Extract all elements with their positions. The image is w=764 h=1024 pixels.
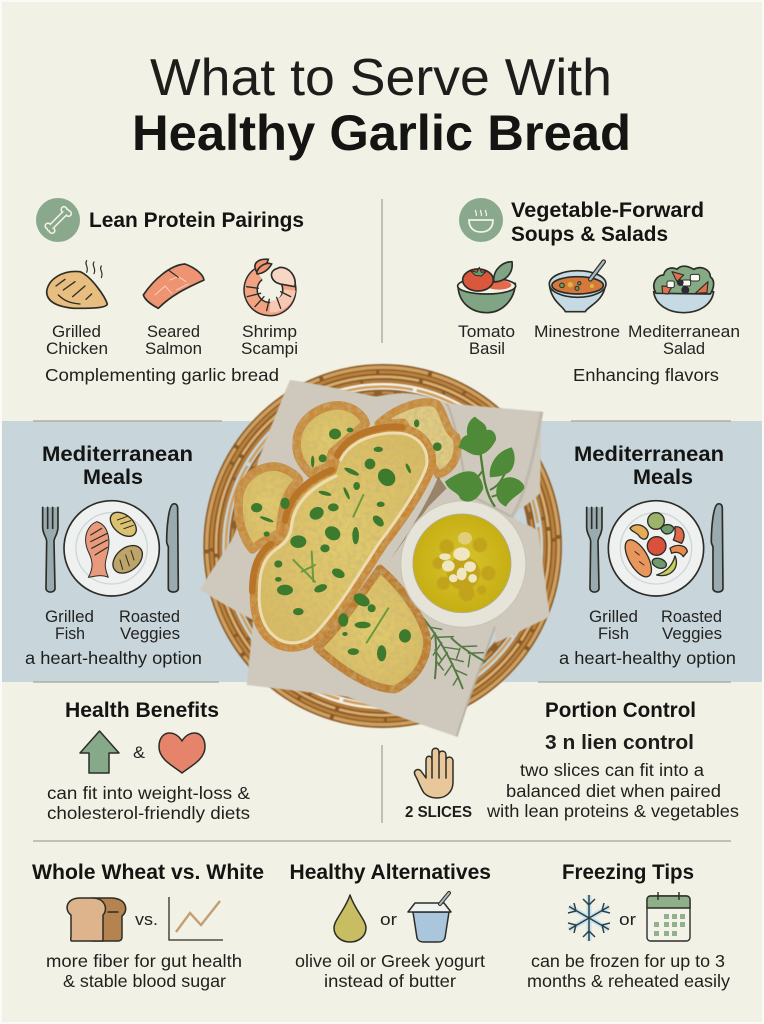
description: can fit into weight-loss & [47, 783, 250, 803]
icon: snowflake [568, 895, 610, 941]
panel: freezing tips [527, 861, 730, 991]
caption: Enhancing flavors [573, 365, 719, 385]
panel: mediterranean meals left [25, 443, 202, 668]
heading [511, 199, 704, 246]
icon: bone badge [36, 198, 80, 242]
icon: plate with vegetables [587, 501, 723, 596]
heading: Lean Protein Pairings [89, 209, 304, 232]
rosemary sprig [423, 618, 485, 688]
item labels: Minestrone [534, 323, 620, 341]
description: balanced diet when paired [506, 781, 721, 801]
icon: calendar [647, 892, 690, 941]
heading [574, 443, 724, 489]
panel: health benefits [47, 699, 250, 823]
description: months & reheated easily [527, 971, 730, 991]
heading: Freezing Tips [562, 861, 694, 884]
item labels: Roasted [119, 608, 180, 626]
item labels: Shrimp [242, 323, 297, 341]
icon: plate with fish and veggies [43, 501, 178, 596]
item labels: Veggies [120, 625, 180, 643]
vs label: vs. [135, 911, 158, 929]
item labels: Mediterranean [628, 323, 740, 341]
hero: basket of garlic bread [200, 367, 559, 737]
item labels: Scampi [241, 340, 298, 358]
icon: up arrow [80, 731, 119, 773]
icon: hand [415, 748, 453, 798]
caption: a heart-healthy option [25, 648, 202, 668]
item labels: Grilled [589, 608, 638, 626]
caption: a heart-healthy option [559, 648, 736, 668]
description [46, 951, 242, 991]
panel: portion control [405, 699, 739, 821]
dip bowl of olive oil and garlic [401, 501, 526, 627]
band: blue background strip [2, 421, 762, 682]
item labels [45, 608, 180, 643]
item labels [46, 323, 298, 358]
description [47, 783, 250, 823]
linen napkin [200, 380, 550, 737]
heading: Mediterranean [42, 443, 193, 466]
title: What to Serve With [150, 49, 612, 107]
or label: or [380, 911, 398, 929]
heading: Soups & Salads [511, 223, 668, 246]
heading: Meals [83, 466, 143, 489]
item labels: Basil [469, 340, 505, 358]
item labels: Seared [147, 323, 200, 341]
description [486, 760, 739, 821]
icon: soup badge [459, 198, 503, 242]
title [132, 49, 631, 161]
icon: yogurt cup [408, 893, 451, 942]
chart: line going up [169, 897, 223, 940]
icon: bread loaf [67, 898, 126, 941]
heading [42, 443, 193, 489]
title: Healthy Garlic Bread [132, 105, 631, 161]
icon: seared salmon [143, 264, 204, 308]
description: & stable blood sugar [63, 971, 226, 991]
bread slices [238, 402, 458, 689]
description: more fiber for gut health [46, 951, 242, 971]
item labels: Fish [598, 625, 629, 643]
panel: whole wheat vs white [32, 861, 264, 991]
panel: mediterranean meals right [559, 443, 736, 668]
item labels [458, 323, 740, 358]
ampersand: & [133, 744, 145, 762]
panel: healthy alternatives [290, 861, 491, 991]
description: cholesterol-friendly diets [47, 803, 250, 823]
description [295, 951, 485, 991]
herb flecks [251, 419, 442, 661]
item labels: Veggies [662, 625, 722, 643]
heading: Health Benefits [65, 699, 219, 722]
item labels: Chicken [46, 340, 108, 358]
item labels: Grilled [52, 323, 101, 341]
icon: mediterranean salad bowl [654, 266, 714, 313]
description: two slices can fit into a [520, 760, 704, 780]
description: instead of butter [324, 971, 456, 991]
description: olive oil or Greek yogurt [295, 951, 485, 971]
icon: oil drop [334, 895, 366, 942]
heading: Vegetable-Forward [511, 199, 704, 222]
heading: Healthy Alternatives [290, 861, 491, 884]
description [527, 951, 730, 991]
heading: Whole Wheat vs. White [32, 861, 264, 884]
caption: Complementing garlic bread [45, 365, 279, 385]
item labels: Grilled [45, 608, 94, 626]
heading: Portion Control [545, 699, 696, 722]
item labels: Tomato [458, 323, 515, 341]
icon: minestrone bowl [549, 262, 606, 312]
description: with lean proteins & vegetables [486, 801, 739, 821]
icon: grilled chicken [47, 261, 107, 308]
item labels: Salmon [145, 340, 202, 358]
item labels: Salad [663, 340, 705, 358]
item labels: Roasted [661, 608, 722, 626]
heading: Meals [633, 466, 693, 489]
icon: heart [159, 733, 205, 773]
item labels [589, 608, 722, 643]
heading: Mediterranean [574, 443, 724, 466]
description: can be frozen for up to 3 [531, 951, 725, 971]
wicker basket [207, 367, 559, 725]
panel: vegetable-forward soups and salads [458, 198, 740, 385]
or label: or [619, 911, 637, 929]
panel: lean protein pairings [36, 198, 304, 385]
item labels: Fish [55, 625, 85, 643]
subheading: 3 n lien control [545, 732, 694, 754]
2 slices label: 2 SLICES [405, 804, 472, 821]
icon: shrimp [247, 259, 295, 311]
parsley sprig [445, 417, 524, 507]
icon: tomato basil bowl [458, 262, 516, 313]
